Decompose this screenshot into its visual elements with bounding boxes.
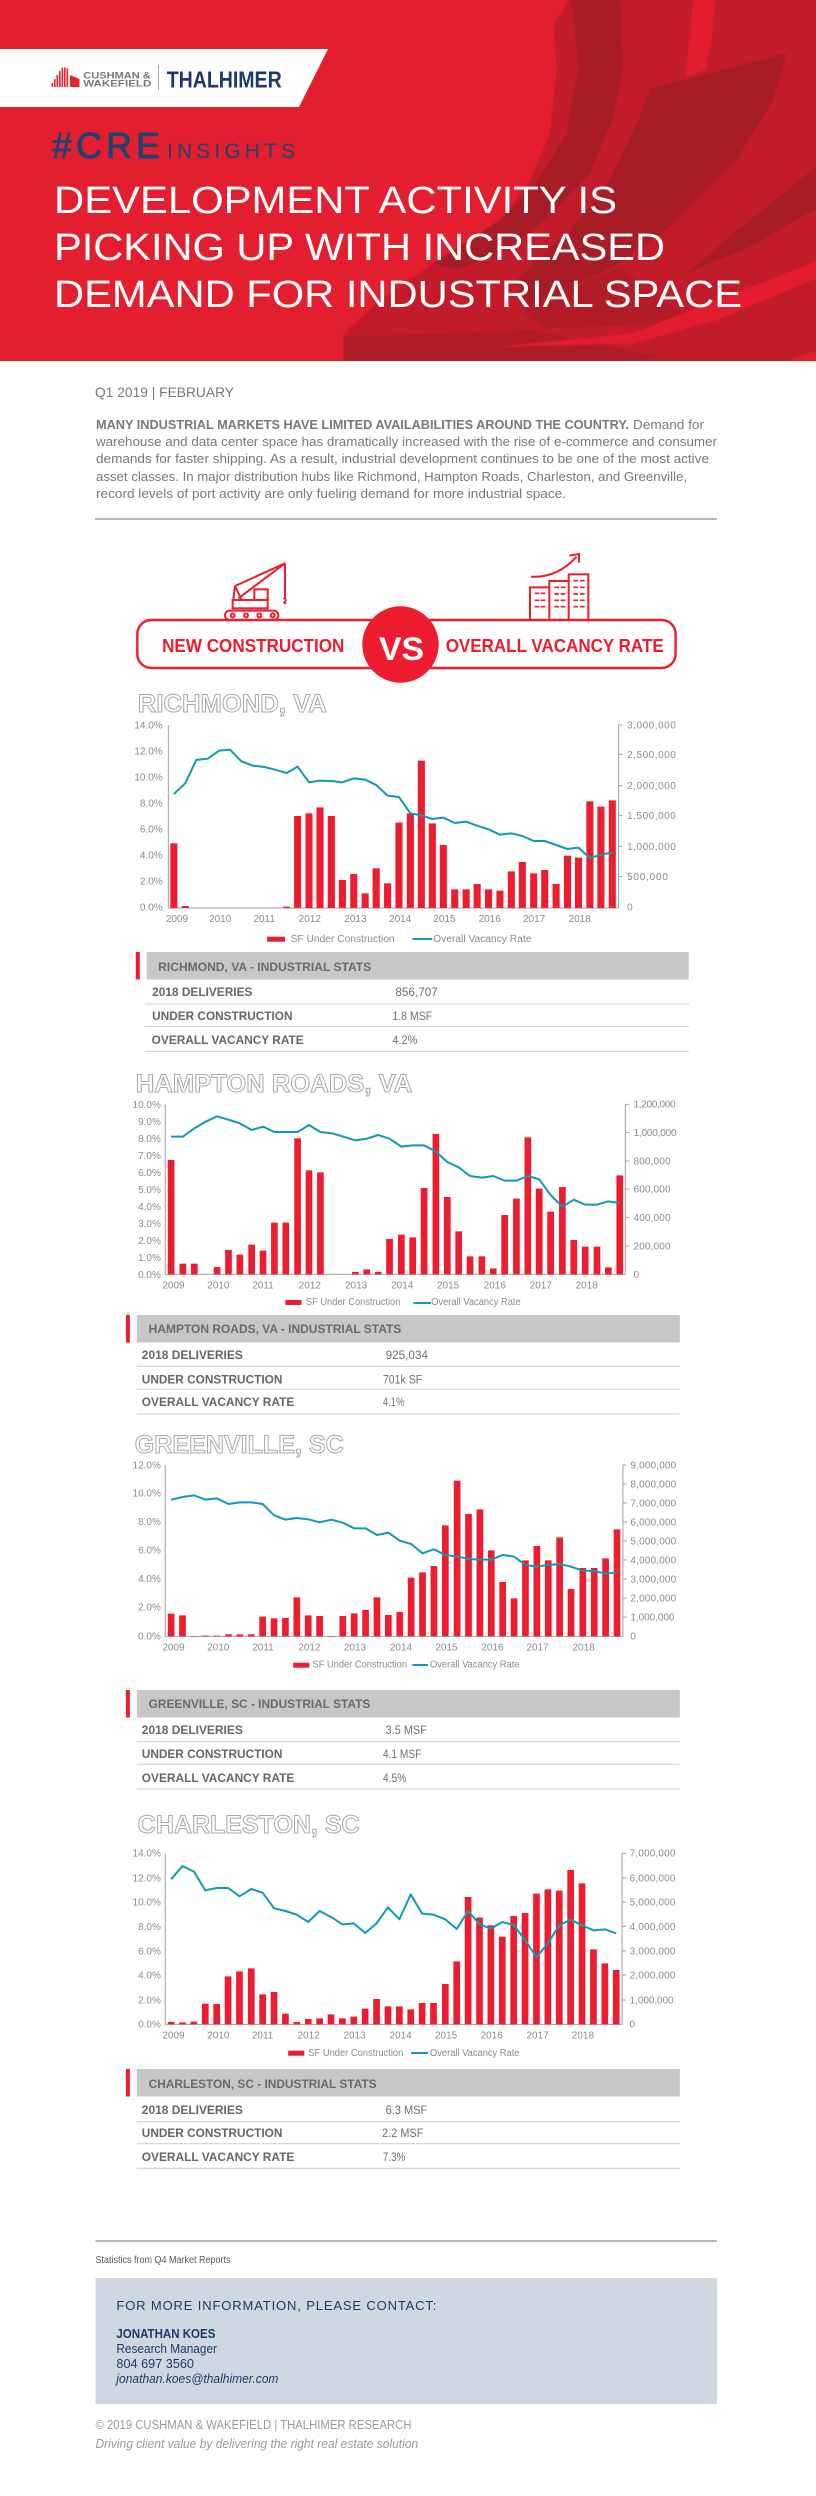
right axis labels: 8,000,000 <box>630 1480 677 1490</box>
left axis labels: 10.0% <box>134 772 163 784</box>
year labels <box>166 914 591 925</box>
heading: Richmond: RICHMOND, VA <box>138 690 327 718</box>
stats table: Charleston: 6.3 MSF <box>386 2105 427 2117</box>
title: DEMAND FOR INDUSTRIAL SPACE <box>54 274 742 316</box>
title: PICKING UP WITH INCREASED <box>54 227 665 269</box>
left axis labels: 4.0% <box>138 1202 161 1213</box>
year labels: 2015 <box>435 1642 458 1654</box>
label: new construction: NEW CONSTRUCTION <box>162 636 344 656</box>
legend: SF Under Construction <box>312 1660 407 1671</box>
stats table: Greenville: 4.1 MSF <box>383 1749 421 1761</box>
left axis labels: 14.0% <box>134 720 163 732</box>
right axis labels: 9,000,000 <box>630 1460 677 1472</box>
left axis labels: 1.0% <box>138 1253 161 1264</box>
VS badge: VS <box>379 631 424 667</box>
stats table: Richmond: OVERALL VACANCY RATE <box>152 1035 304 1047</box>
year labels: 2010 <box>207 1280 230 1292</box>
year labels: 2009 <box>162 1642 185 1654</box>
logo text: Cushman & Wakefield <box>83 70 151 90</box>
legend: Overall Vacancy Rate <box>430 1660 520 1671</box>
intro paragraph <box>95 418 717 501</box>
right axis labels: 500,000 <box>627 872 668 883</box>
year labels: 2016 <box>481 1642 504 1654</box>
left axis labels: 10.0% <box>133 1100 161 1111</box>
brand mark: #CRE Insights <box>52 125 295 166</box>
chart: Greenville construction vs vacancy <box>133 1460 677 1671</box>
panel: Charleston, SC <box>126 1811 680 2168</box>
stats table: Charleston: UNDER CONSTRUCTION <box>142 2128 282 2140</box>
legend: Overall Vacancy Rate <box>430 2048 520 2059</box>
heading: Greenville: GREENVILLE, SC <box>135 1431 344 1459</box>
left axis labels <box>133 1100 161 1281</box>
right axis labels: 5,000,000 <box>630 1898 676 1908</box>
left axis labels: 3.0% <box>138 1219 161 1230</box>
source note: Statistics from Q4 Market Reports <box>96 2255 230 2266</box>
chart plot: bars and vacancy line <box>165 1853 626 2024</box>
stats table: Richmond: 1.8 MSF <box>392 1011 432 1023</box>
right axis labels <box>627 720 676 914</box>
contact details: Research Manager <box>116 2342 217 2356</box>
year labels: 2016 <box>479 914 501 925</box>
right axis labels: 6,000,000 <box>630 1518 677 1528</box>
left axis labels: 5.0% <box>138 1185 161 1196</box>
year labels: 2009 <box>162 1280 185 1292</box>
year labels: 2011 <box>252 1642 274 1654</box>
year labels: 2009 <box>166 914 189 925</box>
left axis labels: 0.0% <box>138 1632 161 1642</box>
stats table: Charleston <box>126 2069 680 2168</box>
left axis labels: 2.0% <box>140 876 163 888</box>
contact details: jonathan.koes@thalhimer.com <box>114 2372 278 2386</box>
year labels: 2018 <box>572 2030 594 2042</box>
stats table: Richmond <box>136 952 689 1052</box>
stats table: Hampton Roads <box>126 1315 680 1414</box>
left axis labels: 8.0% <box>138 1134 161 1145</box>
year labels: 2013 <box>345 1280 368 1292</box>
left axis labels: 2.0% <box>138 1236 161 1247</box>
contact details <box>114 2327 278 2386</box>
stats table: Hampton Roads: 925,034 <box>386 1350 429 1362</box>
left axis labels: 14.0% <box>133 1848 161 1860</box>
date line: Q1 2019 | FEBRUARY <box>95 384 235 400</box>
left axis labels: 2.0% <box>138 1602 161 1614</box>
right axis labels: 7,000,000 <box>630 1498 677 1510</box>
label: overall vacancy rate: OVERALL VACANCY RATE <box>446 636 664 656</box>
right axis labels: 1,000,000 <box>630 1612 675 1624</box>
year labels: 2013 <box>344 1642 367 1654</box>
decorative swoosh shapes <box>343 0 816 367</box>
stats table: Richmond: 4.2% <box>392 1035 417 1047</box>
legend: SF Under Construction <box>291 934 395 945</box>
right axis labels: 0 <box>634 1270 640 1281</box>
stats table: Greenville: 3.5 MSF <box>386 1725 427 1737</box>
stats table: Greenville: 2018 DELIVERIES <box>142 1725 243 1737</box>
right axis labels: 4,000,000 <box>630 1556 677 1566</box>
contact details: 804 697 3560 <box>116 2357 194 2371</box>
intro paragraph: asset classes. In major distribution hubs like Richmond, Hampton Roads, Charleston, and Greenville, <box>96 470 687 484</box>
right axis labels: 1,000,000 <box>627 842 676 853</box>
left axis labels: 10.0% <box>133 1488 161 1500</box>
header banner <box>0 0 816 367</box>
brand mark: #CRE Insights: #CRE <box>52 125 160 166</box>
panel: Hampton Roads, VA <box>126 1070 680 1414</box>
intro paragraph: record levels of port activity are only fueling demand for more industrial space. <box>96 487 566 501</box>
left axis labels: 8.0% <box>140 798 163 810</box>
left axis labels: 6.0% <box>140 824 163 836</box>
stats table: Hampton Roads: HAMPTON ROADS, VA - INDUSTRIAL STATS <box>149 1324 402 1336</box>
left axis labels: 6.0% <box>138 1946 161 1958</box>
chart plot: bars and vacancy line <box>168 725 623 908</box>
left axis labels: 8.0% <box>138 1517 161 1528</box>
right axis labels: 2,000,000 <box>630 1594 677 1604</box>
intro paragraph: Demand for <box>633 418 704 432</box>
chart: Charleston construction vs vacancy <box>133 1848 676 2059</box>
heading: Hampton Roads: HAMPTON ROADS, VA <box>136 1070 412 1098</box>
intro paragraph: MANY INDUSTRIAL MARKETS HAVE LIMITED AVAILABILITIES AROUND THE COUNTRY. <box>96 418 629 432</box>
year labels: 2009 <box>162 2030 185 2042</box>
right axis labels <box>630 1460 677 1642</box>
right axis labels: 0 <box>630 2020 636 2030</box>
right axis labels: 2,000,000 <box>627 781 676 792</box>
left axis labels: 0.0% <box>140 902 163 914</box>
right axis labels: 2,500,000 <box>627 750 676 761</box>
right axis labels: 7,000,000 <box>630 1848 676 1860</box>
title <box>54 180 742 316</box>
chart plot: bars and vacancy line <box>165 1104 629 1274</box>
stats table: Hampton Roads: 4.1% <box>383 1397 404 1409</box>
stats table: Richmond: 856,707 <box>395 987 438 999</box>
brand mark: #CRE Insights: INSIGHTS <box>167 140 295 163</box>
year labels: 2018 <box>569 914 591 925</box>
right axis labels: 3,000,000 <box>630 1946 676 1958</box>
legend: SF Under Construction <box>308 2048 403 2059</box>
year labels: 2017 <box>523 914 546 925</box>
right axis labels: 1,200,000 <box>634 1100 676 1110</box>
logo text: Cushman & Wakefield: CUSHMAN & <box>83 70 151 81</box>
stats table: Greenville: OVERALL VACANCY RATE <box>142 1773 295 1785</box>
year labels: 2010 <box>207 1642 230 1654</box>
year labels: 2011 <box>252 2030 274 2042</box>
year labels: 2014 <box>389 2030 412 2042</box>
year labels: 2016 <box>484 1280 506 1292</box>
VS badge <box>362 606 439 683</box>
left axis labels: 2.0% <box>138 1996 161 2006</box>
right axis labels: 1,000,000 <box>634 1128 677 1139</box>
panel: Richmond, VA <box>134 690 689 1052</box>
legend: SF Under Construction <box>306 1297 400 1308</box>
stats table: Greenville: 4.5% <box>383 1773 406 1785</box>
logo icon: Cushman & Wakefield building <box>52 68 80 87</box>
left axis labels: 4.0% <box>138 1574 161 1585</box>
right axis labels: 1,000,000 <box>630 1996 674 2006</box>
label pill <box>137 620 676 668</box>
copyright line: © 2019 CUSHMAN & WAKEFIELD | THALHIMER RESEARCH <box>96 2418 412 2432</box>
year labels: 2014 <box>391 1280 414 1292</box>
year labels: 2010 <box>209 914 232 925</box>
contact heading: FOR MORE INFORMATION, PLEASE CONTACT: <box>116 2298 436 2313</box>
left axis labels: 6.0% <box>138 1546 161 1556</box>
icon: crane <box>225 563 286 620</box>
intro paragraph: warehouse and data center space has dramatically increased with the rise of e-commerce and consumer <box>95 435 717 449</box>
logo strip <box>0 49 328 107</box>
right axis labels <box>630 1848 676 2030</box>
year labels: 2014 <box>389 914 412 925</box>
stats table: Hampton Roads: 2018 DELIVERIES <box>142 1350 243 1362</box>
year labels: 2012 <box>298 1642 321 1654</box>
right axis labels: 400,000 <box>634 1213 671 1224</box>
chart: Richmond construction vs vacancy <box>134 720 676 945</box>
stats table: Charleston: CHARLESTON, SC - INDUSTRIAL STATS <box>149 2079 377 2091</box>
stats table: Richmond: 2018 DELIVERIES <box>152 987 253 999</box>
left axis labels: 12.0% <box>133 1874 161 1884</box>
year labels: 2018 <box>572 1642 595 1654</box>
chart plot: bars and vacancy line <box>165 1465 627 1636</box>
left axis labels: 8.0% <box>138 1922 161 1933</box>
legend: Overall Vacancy Rate <box>431 1297 521 1308</box>
legend <box>293 1660 520 1671</box>
right axis labels: 6,000,000 <box>630 1874 676 1884</box>
logo text: Cushman & Wakefield: WAKEFIELD <box>83 79 151 90</box>
year labels: 2011 <box>252 1280 274 1292</box>
year labels: 2012 <box>299 914 321 925</box>
left axis labels <box>133 1848 161 2030</box>
year labels <box>162 1642 595 1654</box>
right axis labels: 600,000 <box>634 1184 671 1196</box>
right axis labels: 800,000 <box>634 1156 671 1168</box>
stats table: Hampton Roads: 701k SF <box>383 1374 422 1386</box>
stats table: Greenville <box>126 1690 680 1789</box>
stats table: Charleston: 7.3% <box>383 2152 405 2164</box>
stats table: Richmond: RICHMOND, VA - INDUSTRIAL STATS <box>158 962 372 974</box>
heading: Charleston: CHARLESTON, SC <box>138 1811 360 1839</box>
tagline: Driving client value by delivering the right real estate solution <box>96 2437 418 2451</box>
stats table: Hampton Roads: UNDER CONSTRUCTION <box>142 1374 282 1386</box>
year labels: 2017 <box>526 2030 549 2042</box>
right axis labels: 3,000,000 <box>627 720 676 732</box>
year labels <box>162 1280 598 1292</box>
title: DEVELOPMENT ACTIVITY IS <box>54 180 617 222</box>
year labels <box>162 2030 594 2042</box>
year labels: 2018 <box>576 1280 598 1292</box>
versus banner <box>137 554 676 683</box>
left axis labels: 10.0% <box>133 1898 161 1908</box>
legend <box>285 1297 521 1308</box>
legend <box>288 2048 520 2059</box>
left axis labels: 9.0% <box>138 1117 161 1128</box>
year labels: 2015 <box>435 2030 458 2042</box>
left axis labels: 12.0% <box>133 1460 161 1472</box>
left axis labels: 12.0% <box>134 746 163 758</box>
year labels: 2016 <box>481 2030 503 2042</box>
legend <box>267 934 532 945</box>
right axis labels: 1,500,000 <box>627 811 676 822</box>
left axis labels <box>133 1460 161 1642</box>
left axis labels: 4.0% <box>140 850 163 862</box>
year labels: 2015 <box>437 1280 460 1292</box>
contact details: JONATHAN KOES <box>116 2327 215 2341</box>
left axis labels: 6.0% <box>138 1168 161 1179</box>
stats table: Hampton Roads: OVERALL VACANCY RATE <box>142 1397 295 1409</box>
year labels: 2013 <box>344 914 367 925</box>
left axis labels: 0.0% <box>138 1270 161 1281</box>
icon: buildings with rising arrow <box>530 554 588 621</box>
year labels: 2017 <box>526 1642 549 1654</box>
right axis labels: 3,000,000 <box>630 1574 677 1586</box>
left axis labels: 7.0% <box>138 1151 161 1162</box>
logo text: Thalhimer: THALHIMER <box>167 66 282 92</box>
legend: Overall Vacancy Rate <box>433 934 532 945</box>
stats table: Charleston: 2018 DELIVERIES <box>142 2105 243 2117</box>
right axis labels: 5,000,000 <box>630 1536 677 1548</box>
right axis labels <box>634 1100 677 1281</box>
year labels: 2011 <box>253 914 275 925</box>
stats table: Charleston: 2.2 MSF <box>382 2128 423 2140</box>
intro paragraph: demands for faster shipping. As a result, industrial development continues to be one of the most active <box>96 452 709 466</box>
stats table: Richmond: UNDER CONSTRUCTION <box>152 1011 292 1023</box>
right axis labels: 0 <box>630 1632 636 1642</box>
year labels: 2017 <box>530 1280 552 1292</box>
left axis labels: 4.0% <box>138 1970 161 1982</box>
left axis labels: 0.0% <box>138 2020 161 2030</box>
right axis labels: 2,000,000 <box>630 1970 676 1982</box>
chart: Hampton Roads construction vs vacancy <box>133 1100 677 1308</box>
right axis labels: 4,000,000 <box>630 1922 676 1933</box>
year labels: 2012 <box>299 1280 321 1292</box>
panel: Greenville, SC <box>126 1431 680 1789</box>
stats table: Charleston: OVERALL VACANCY RATE <box>142 2152 295 2164</box>
stats table: Greenville: GREENVILLE, SC - INDUSTRIAL STATS <box>149 1699 371 1711</box>
contact box <box>96 2278 717 2404</box>
year labels: 2015 <box>433 914 456 925</box>
year labels: 2014 <box>390 1642 413 1654</box>
year labels: 2012 <box>297 2030 320 2042</box>
right axis labels: 0 <box>627 902 633 914</box>
year labels: 2013 <box>343 2030 366 2042</box>
left axis labels <box>134 720 163 914</box>
year labels: 2010 <box>207 2030 230 2042</box>
right axis labels: 200,000 <box>634 1242 671 1252</box>
stats table: Greenville: UNDER CONSTRUCTION <box>142 1749 282 1761</box>
